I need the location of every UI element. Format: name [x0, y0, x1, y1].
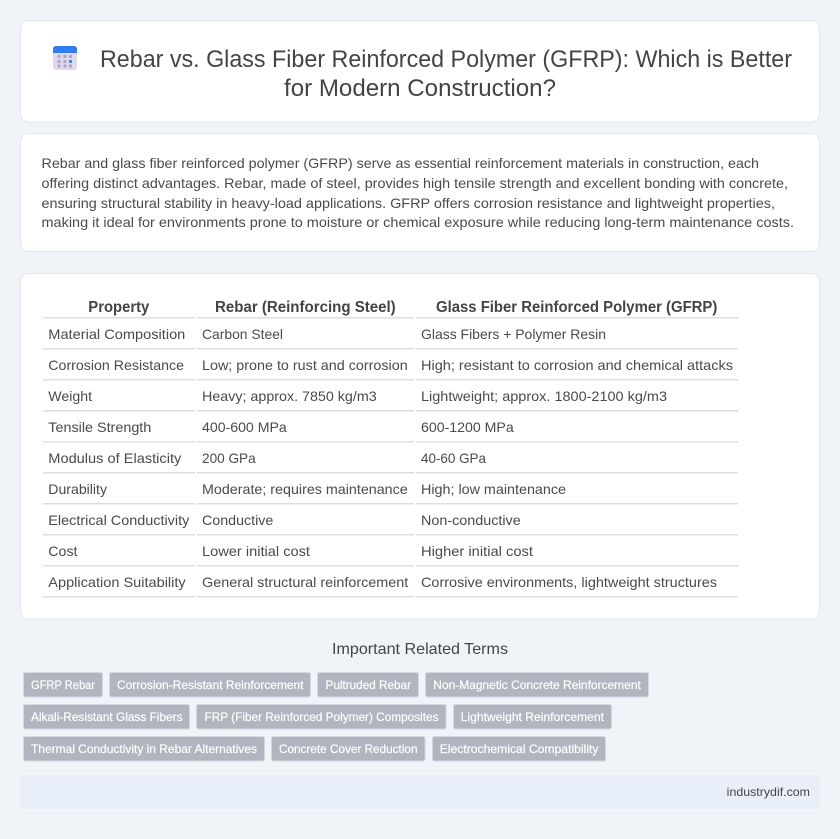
row: material composition: Glass Fibers + Polymer Resin	[421, 326, 606, 342]
row: tensile strength: 400-600 MPa	[202, 419, 287, 435]
text block: description	[42, 155, 794, 230]
row: durability: Durability	[48, 481, 107, 497]
tag: Non-Magnetic Concrete Reinforcement: Non-Magnetic Concrete Reinforcement	[433, 678, 641, 692]
row: modulus of elasticity: 200 GPa	[202, 450, 256, 466]
row: durability: Moderate; requires maintenance	[202, 481, 408, 497]
tag: FRP (Fiber Reinforced Polymer) Composites: FRP (Fiber Reinforced Polymer) Composites	[204, 710, 438, 724]
tag: Non-Magnetic Concrete Reinforcement	[426, 672, 648, 697]
icon: calendar	[53, 46, 77, 70]
text block: description: making it ideal for environments prone to moisture or chemical exposure while reducing long-term maintenance costs.	[42, 214, 794, 230]
row: corrosion resistance: Low; prone to rust and corrosion	[202, 357, 408, 373]
tag: Pultruded Rebar	[318, 672, 418, 697]
row: corrosion resistance: High; resistant to corrosion and chemical attacks	[421, 357, 733, 373]
row: weight: Lightweight; approx. 1800-2100 kg/m3	[421, 388, 667, 404]
tag: FRP (Fiber Reinforced Polymer) Composites	[196, 704, 446, 729]
tag: Pultruded Rebar: Pultruded Rebar	[326, 678, 411, 692]
table header	[88, 299, 717, 316]
text block: description: ensuring structural stability in heavy-load applications. GFRP offers corrosion resistance and lightweight properties,	[42, 195, 775, 211]
row: application suitability: Application Suitability	[48, 574, 186, 590]
tag: Lightweight Reinforcement: Lightweight Reinforcement	[461, 710, 605, 724]
tags: related terms	[24, 672, 648, 761]
panel: title card	[20, 20, 820, 122]
title: for Modern Construction?	[284, 75, 556, 102]
row: cost: Higher initial cost	[421, 543, 533, 559]
text block: description: Rebar and glass fiber reinforced polymer (GFRP) serve as essential reinforcement materials in construction, each	[42, 155, 759, 171]
footer: industrydif.com	[727, 785, 810, 799]
footer	[20, 775, 820, 809]
tag: Corrosion-Resistant Reinforcement	[110, 672, 310, 697]
tag: GFRP Rebar: GFRP Rebar	[31, 678, 95, 692]
row: cost: Lower initial cost	[202, 543, 310, 559]
tag: GFRP Rebar	[24, 672, 102, 697]
row: application suitability	[48, 574, 717, 590]
panel: comparison table	[20, 274, 820, 619]
row: modulus of elasticity	[48, 450, 486, 466]
title	[100, 46, 792, 102]
row: modulus of elasticity: Modulus of Elasticity	[48, 450, 181, 466]
tag: Concrete Cover Reduction: Concrete Cover Reduction	[279, 742, 418, 756]
row: corrosion resistance	[48, 357, 733, 373]
row: electrical conductivity: Conductive	[202, 512, 274, 528]
row: cost	[48, 543, 533, 559]
row: weight: Heavy; approx. 7850 kg/m3	[202, 388, 377, 404]
row: material composition: Carbon Steel	[202, 326, 283, 342]
row: cost: Cost	[48, 543, 78, 559]
tag: Electrochemical Compatibility	[432, 736, 606, 761]
table header: Property	[88, 299, 149, 316]
tag: Alkali-Resistant Glass Fibers: Alkali-Resistant Glass Fibers	[31, 710, 182, 724]
tag: Corrosion-Resistant Reinforcement: Corrosion-Resistant Reinforcement	[117, 678, 304, 692]
row: durability	[48, 481, 566, 497]
tag: Lightweight Reinforcement	[454, 704, 612, 729]
row: tensile strength	[48, 419, 514, 435]
row: durability: High; low maintenance	[421, 481, 566, 497]
tag: Concrete Cover Reduction	[272, 736, 425, 761]
title: Rebar vs. Glass Fiber Reinforced Polymer (GFRP): Which is Better	[100, 46, 792, 73]
row: electrical conductivity	[48, 512, 521, 528]
row: weight: Weight	[48, 388, 92, 404]
row: electrical conductivity: Non-conductive	[421, 512, 521, 528]
row: weight	[48, 388, 667, 404]
row: tensile strength: Tensile Strength	[48, 419, 151, 435]
row: corrosion resistance: Corrosion Resistance	[48, 357, 184, 373]
row: tensile strength: 600-1200 MPa	[421, 419, 514, 435]
row: application suitability: General structural reinforcement	[202, 574, 408, 590]
row: material composition: Material Composition	[48, 326, 185, 342]
tag: Thermal Conductivity in Rebar Alternatives: Thermal Conductivity in Rebar Alternatives	[31, 742, 257, 756]
row: material composition	[48, 326, 606, 342]
tag: Thermal Conductivity in Rebar Alternatives	[24, 736, 264, 761]
row: application suitability: Corrosive environments, lightweight structures	[421, 574, 717, 590]
text block: description: offering distinct advantages. Rebar, made of steel, provides high tensile strength and excellent bonding with concrete,	[42, 175, 788, 191]
panel: description	[20, 134, 820, 252]
row: electrical conductivity: Electrical Conductivity	[48, 512, 189, 528]
tag: Electrochemical Compatibility: Electrochemical Compatibility	[440, 742, 598, 756]
row: modulus of elasticity: 40-60 GPa	[421, 450, 486, 466]
heading: important related terms: Important Related Terms	[332, 641, 508, 658]
table header: Glass Fiber Reinforced Polymer (GFRP)	[436, 299, 717, 316]
tag: Alkali-Resistant Glass Fibers	[24, 704, 190, 729]
table header: Rebar (Reinforcing Steel)	[215, 299, 396, 316]
